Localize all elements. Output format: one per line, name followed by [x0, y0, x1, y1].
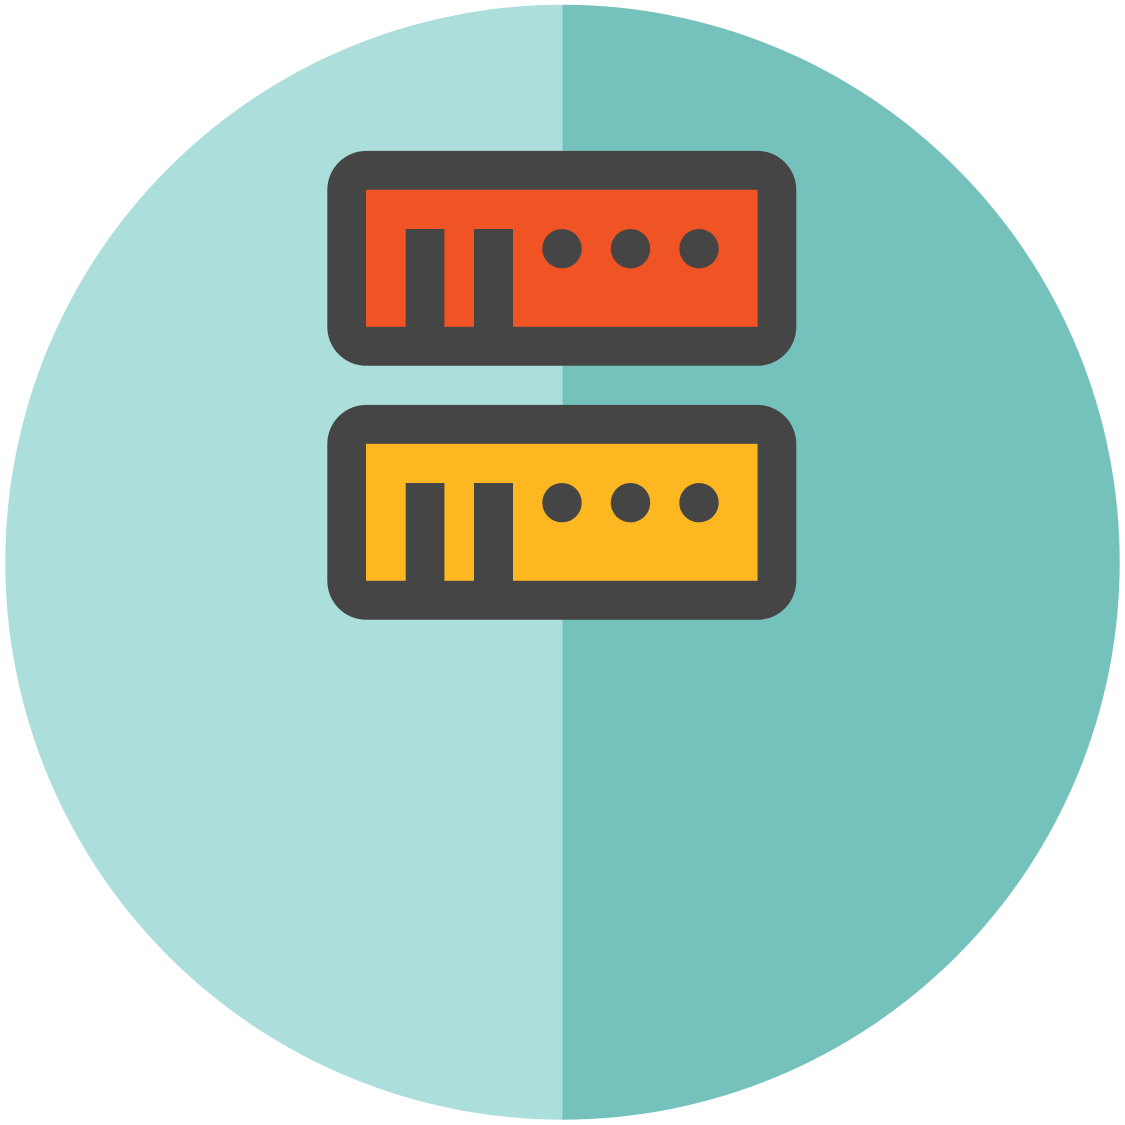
icon: bottom server unit	[327, 405, 796, 620]
icon: top server unit	[327, 151, 796, 366]
circle background: left half	[5, 5, 562, 1120]
circle background: right half	[562, 5, 1120, 1120]
